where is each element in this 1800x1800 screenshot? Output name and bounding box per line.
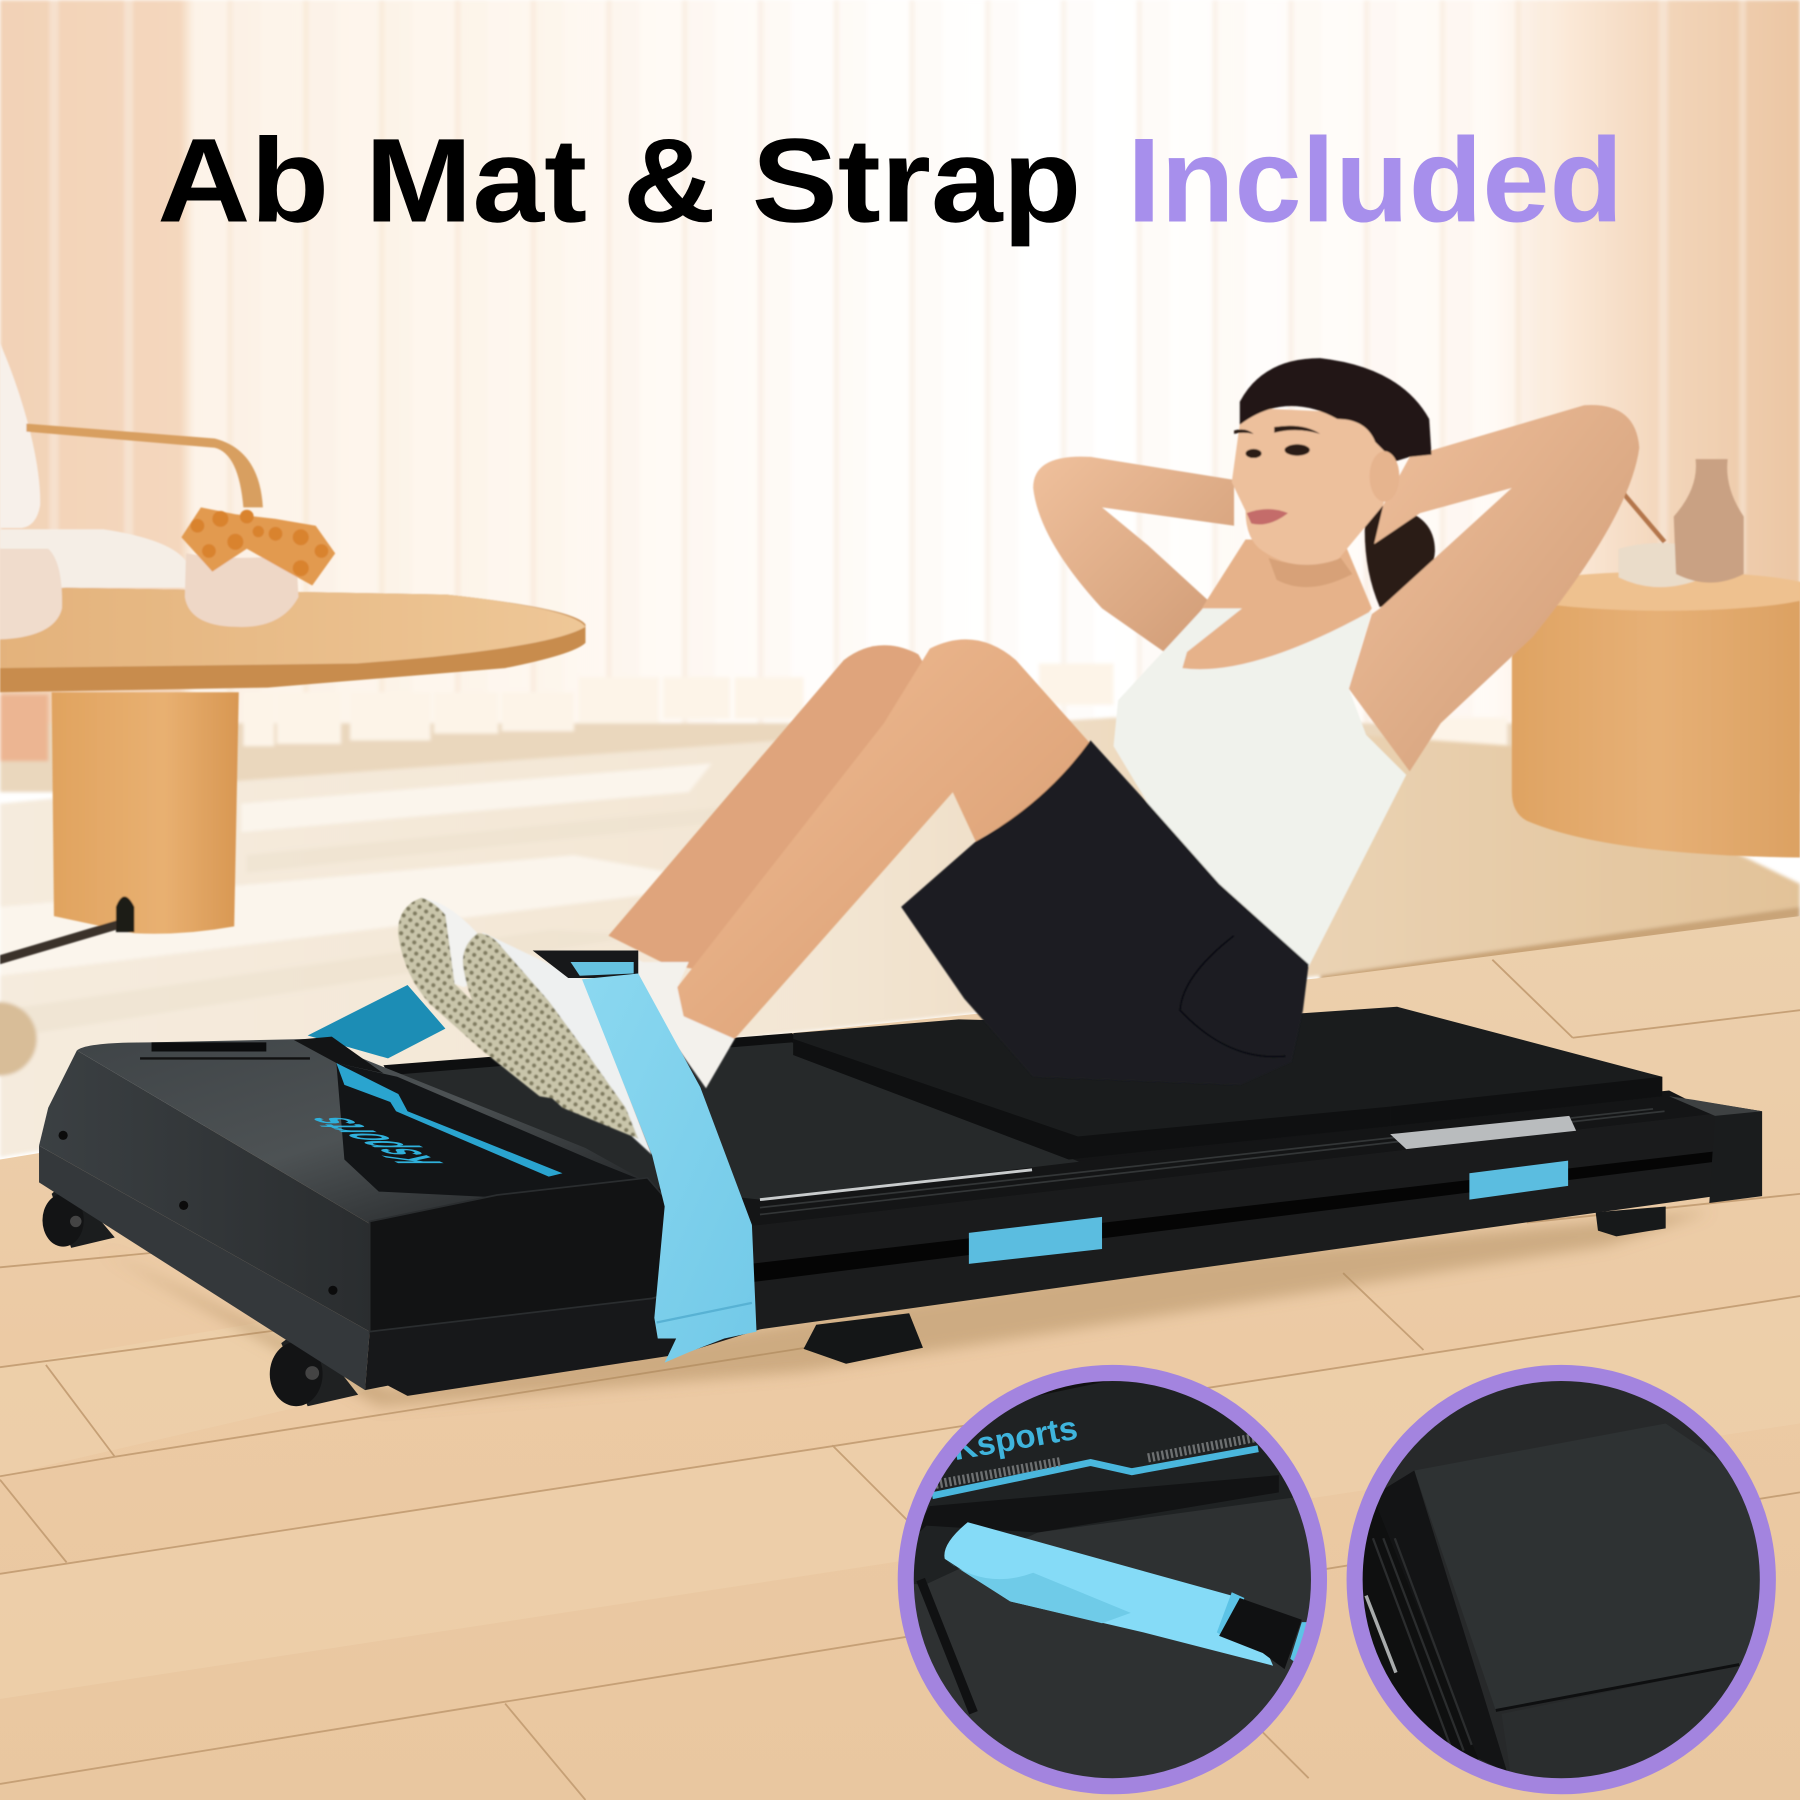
shorts [901, 740, 1309, 1085]
woman [398, 358, 1639, 1155]
title: Ab Mat & Strap [157, 115, 1081, 248]
treadmill [39, 1007, 1762, 1406]
near leg [677, 639, 1091, 1039]
ab mat [793, 1007, 1662, 1159]
hood side [39, 1050, 370, 1332]
wheels [42, 1180, 358, 1406]
far leg [608, 645, 964, 976]
mouth [1247, 509, 1288, 525]
ponytail [1365, 505, 1435, 607]
rear foot [804, 1313, 923, 1364]
chin shadow [1268, 558, 1352, 587]
left shoes [398, 898, 652, 1155]
hood top [77, 1039, 647, 1224]
right end cap [1669, 1096, 1762, 1203]
foot straps [294, 951, 757, 1363]
rug and back floor [0, 717, 1800, 1157]
rail top surface [654, 1096, 1715, 1234]
hair [1240, 358, 1432, 461]
living room furniture: chair and coffee table [0, 343, 585, 964]
floor shadow [103, 1211, 1710, 1406]
title: Included [1127, 115, 1623, 248]
right side table and vases [1510, 459, 1800, 858]
belt [397, 1042, 1079, 1200]
face [1232, 408, 1387, 565]
tank top [1114, 608, 1406, 967]
right arm [1349, 405, 1639, 771]
wall and curtains [0, 0, 1800, 792]
deck backing [643, 1091, 1715, 1280]
gap behind rails [689, 1142, 1715, 1291]
screws [59, 1131, 337, 1295]
blue hood line [336, 1063, 562, 1177]
hood logo: Ksports [285, 1117, 460, 1164]
torso skin and neck [1171, 540, 1372, 683]
eyes and brows [1234, 426, 1320, 458]
lower side rail [672, 1162, 1715, 1357]
upper side rail [660, 1114, 1715, 1274]
detail circle: strap: Ksports [950, 1410, 1080, 1468]
title [157, 115, 1623, 248]
purple circle rings [906, 1373, 1768, 1786]
wood floor [0, 916, 1800, 1800]
detail circle: strap [914, 1381, 1311, 1778]
base front [365, 1291, 677, 1396]
left arm [1033, 457, 1234, 657]
detail circle: mat [1355, 1373, 1768, 1791]
label sticker [1390, 1116, 1576, 1149]
hood front [370, 1178, 677, 1332]
base side [39, 1146, 370, 1390]
right shoe [624, 953, 735, 1088]
blue tabs [969, 1161, 1568, 1264]
ear [1370, 451, 1399, 502]
back rail [383, 1033, 804, 1077]
hood dark glass [336, 1063, 647, 1197]
right foot [1596, 1207, 1666, 1236]
